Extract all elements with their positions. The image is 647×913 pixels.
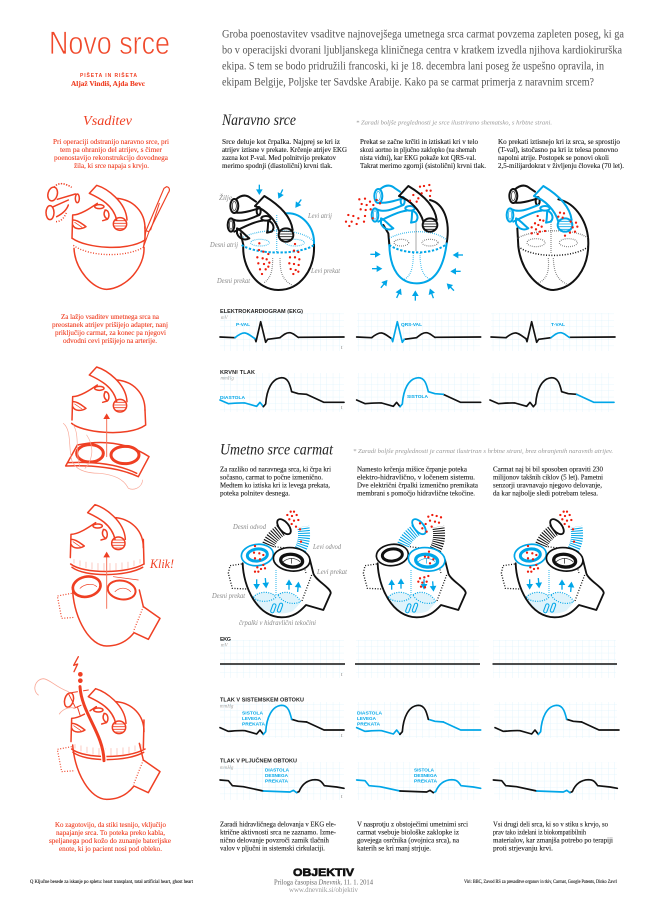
wave labels: P-VAL <box>236 322 250 328</box>
text: bottom column 1: Zaradi hidravličnega delovanja v EKG ele- <box>220 820 336 828</box>
text: bottom column 1: valov v pljučni in sistemski cirkulaciji. <box>220 843 325 852</box>
labels: natural heart: Žilje <box>219 192 233 202</box>
chart label: tlak v sistemskem obtoku: mmHg <box>220 704 234 710</box>
labels: natural heart: Levi atrij <box>307 211 332 220</box>
chart: EKG flat line: t <box>341 673 343 678</box>
text: bottom column 3: materialov, kar zmanjša potrebo po terapiji <box>493 835 613 844</box>
wave labels: SISTOLA <box>242 710 264 716</box>
byline: PIŠETA IN RIŠETA <box>80 71 137 79</box>
text: column 2: Namesto krčenja mišice črpanje poteka <box>357 464 468 474</box>
text: bottom column 2: V nasprotju z obstoječimi umetnimi srci <box>357 820 468 828</box>
footer: logo and publication <box>274 867 374 894</box>
text: bottom column 3: proti strjevanju krvi. <box>493 843 553 852</box>
chart label: EKG <box>220 637 231 648</box>
wave labels: LEVEGA <box>357 716 377 722</box>
chart label: krvni tlak: mmHg <box>220 376 234 382</box>
labels: carmat heart <box>211 522 348 627</box>
wave labels: PREKATA <box>242 722 266 728</box>
text: step 3: enote, ki jo pacient nosi pod obleko. <box>59 844 162 853</box>
heading: umetno srce carmat: Umetno srce carmat <box>220 442 334 458</box>
wave labels: PREKATA <box>265 778 289 784</box>
text: column 3: 2,5-milijardokrat v življenju človeka (70 let). <box>498 161 624 170</box>
intro text <box>222 28 624 88</box>
chart label: EKG: ELEKTROKARDIOGRAM (EKG) <box>220 309 303 315</box>
footer: keywords: Q Ključne besede za iskanje po spletu: heart transplant, total artificial heart, ghost heart <box>30 880 194 885</box>
wave labels <box>265 768 438 800</box>
text: step 2: odvodni cevi prišijejo na arterije. <box>63 336 157 345</box>
intro text: ekipa. S tem se bodo pridružili francoski, ki je 18. decembra lani poseg že uspešno opravila, in <box>222 60 604 72</box>
note: * Zaradi boljše preglednosti je carmat ilustriran s hrbtne strani, brez ohranjenih naravnih atrijev. <box>353 448 613 455</box>
illustration: carmat heart 2 <box>363 515 466 617</box>
text: bottom column 2 <box>357 820 468 852</box>
text: column 1 <box>220 464 331 498</box>
wave labels: t <box>341 406 343 411</box>
text: step 2: preostanek atrijev prišijejo adapter, nanj <box>52 320 168 329</box>
heading: vsaditev: Vsaditev <box>83 114 133 129</box>
wave labels: t <box>341 795 343 800</box>
illustration: carmat heart 3 <box>501 512 604 617</box>
text: column 3: senzorji uravnavajo njegovo delovanje, <box>493 480 602 490</box>
illustration: removed heart and scalpel <box>46 184 169 289</box>
label: klik: Klik! <box>149 556 174 571</box>
text: step 2: Za lažjo vsaditev umetnega srca na <box>61 312 160 321</box>
footer: logo and publication: www.dnevnik.si/objektiv <box>289 887 359 894</box>
text: bottom column 1: nično delovanje povzroči zamik tlačnih <box>220 835 329 844</box>
labels: carmat heart: Levi odvod <box>312 542 341 551</box>
byline <box>71 71 146 88</box>
chart label: tlak v sistemskem obtoku: TLAK V SISTEMSKEM OBTOKU <box>220 698 304 704</box>
text: column 1: Srce deluje kot črpalka. Najprej se kri iz <box>222 137 341 146</box>
text: column 1: merimo spodnji (diastolični) krvni tlak. <box>222 161 333 170</box>
chart label: tlak v pljučnem obtoku <box>220 758 297 771</box>
footer: logo and publication: Priloga časopisa Dnevnik, 11. 1. 2014 <box>274 880 374 886</box>
wave labels: T-VAL <box>551 322 565 328</box>
chart: blood pressure <box>220 370 614 412</box>
text: column 1: poteka polnitev desnega. <box>220 488 290 498</box>
chart label: EKG <box>220 309 303 321</box>
chart label: krvni tlak <box>220 370 255 382</box>
wave labels: DIASTOLA <box>220 395 246 401</box>
text: column 1: Za razliko od naravnega srca, ki črpa kri <box>220 464 331 474</box>
text: bottom column 1: ktrične aktivnosti srca ne zaznamo. Izme- <box>220 827 336 836</box>
illustration: natural heart, relaxation <box>507 186 588 290</box>
illustration: carmat heart 1 <box>228 512 331 617</box>
text: step 1: poenostavijo rekonstrukcijo dovodnega <box>54 153 169 162</box>
chart label: tlak v sistemskem obtoku <box>220 698 304 710</box>
wave labels: LEVEGA <box>242 716 262 722</box>
chart label: EKG: mV <box>221 316 229 321</box>
text: bottom column 2: katerih se kri manj strjuje. <box>357 843 431 852</box>
text: column 2: skozi aortno in pljučno zaklopko (na shemah <box>360 145 476 154</box>
text: step 3 <box>49 820 172 853</box>
text: step 1: Pri operaciji odstranijo naravno srce, pri <box>53 137 169 146</box>
chart label: tlak v pljučnem obtoku: mmHg <box>220 766 234 771</box>
text: column 1: atrijev iztisne v prekate. Krčenje atrijev EKG <box>222 145 348 154</box>
illustration: natural heart, atrial contraction <box>228 185 314 290</box>
text: column 1: sočasno, carmat to počne izmenično. <box>220 472 323 482</box>
text: column 2: Prekat se začne krčiti in iztiskati kri v telo <box>360 137 478 146</box>
wave labels <box>220 394 429 411</box>
title: Novo srce <box>49 25 170 61</box>
text: step 2: priključijo carmat, za konec pa njegovi <box>55 328 166 337</box>
wave labels: QRS-VAL <box>401 322 422 328</box>
note: * Zaradi boljše preglednosti je srce ilustrirano shematsko, s hrbtne strani. <box>356 120 552 126</box>
text: column 2: elektro-hidravlično, v ločenem sistemu. <box>357 472 475 482</box>
wave labels <box>242 710 383 739</box>
text: column 3 <box>498 137 624 170</box>
text: column 3: milijonov takšnih ciklov (5 let). Pametni <box>493 472 603 482</box>
text: column 2: Takrat merimo zgornji (sistolični) krvni tlak. <box>360 161 486 170</box>
chart label: tlak v pljučnem obtoku: TLAK V PLJUČNEM OBTOKU <box>220 758 297 764</box>
wave labels: SISTOLA <box>407 394 429 400</box>
text: column 2: Dve električni črpalki izmenično premikata <box>357 480 479 490</box>
text: step 1 <box>53 137 169 170</box>
text: bottom column 2: carmat vsebuje biološke zaklopke iz <box>357 827 460 836</box>
text: column 1: Medtem ko iztiska kri iz levega prekata, <box>220 480 330 490</box>
heading: naravno srce: Naravno srce <box>221 112 296 129</box>
panel: umetno srce carmat <box>211 442 619 852</box>
text: column 3: Ko prekati iztisnejo kri iz srca, se sprostijo <box>498 137 620 146</box>
text: column 3: Carmat naj bi bil sposoben opraviti 230 <box>493 464 603 474</box>
wave labels: t <box>341 346 343 351</box>
wave labels: DESNEGA <box>265 773 289 779</box>
chart label: EKG: mV <box>221 644 229 648</box>
illustration: click connection <box>57 505 160 646</box>
labels: natural heart: Desni prekat <box>216 276 251 285</box>
chart: EKG flat line <box>220 637 617 678</box>
chart: pulmonary pressure <box>220 758 617 800</box>
text: column 3: da kar najbolje sledi potrebam telesa. <box>493 488 598 498</box>
wave labels: t <box>341 734 343 739</box>
footer: sources: Viri: BBC, Zavod RS za presaditve organov in tkiv, Carmat, Google Patents, Dinko Zavrl <box>464 880 618 885</box>
text: column 1: zazna kot P-val. Med polnitvijo prekatov <box>222 153 336 162</box>
text: bottom column 1 <box>220 820 336 852</box>
labels: carmat heart: Desni odvod <box>232 522 266 531</box>
text: step 3: napajanje srca. To poteka preko kabla, <box>56 828 165 837</box>
text: column 2: nista vidni), kar EKG pokaže kot QRS-val. <box>360 153 476 162</box>
text: step 1: žila, ki srce napaja s krvjo. <box>74 161 149 170</box>
wave labels: PREKATA <box>414 778 438 784</box>
text: step 3: Ko zagotovijo, da stiki tesnijo, vključijo <box>55 820 166 829</box>
text: step 3: speljanega pod kožo do zunanje baterijske <box>49 836 172 845</box>
panel: vsaditev <box>35 114 174 853</box>
text: column 1 <box>222 137 348 170</box>
illustration: powered heart with cable <box>35 657 160 799</box>
wave labels <box>236 322 565 351</box>
labels: natural heart <box>209 192 341 285</box>
labels: carmat heart: Desni prekat <box>211 591 246 600</box>
text: step 1: tem pa ohranijo del atrijev, s čimer <box>60 145 162 154</box>
text: bottom column 3: prav tako izdelani iz biokompatibilnih <box>493 827 586 836</box>
text: step 2 <box>52 312 168 345</box>
text: column 2 <box>357 464 479 498</box>
text: column 3: (T-val), istočasno pa kri iz telesa ponovno <box>498 145 618 154</box>
intro text: ekipam Belgije, Poljske ter Savdske Arabije. Kako pa se carmat primerja z naravnim srcem? <box>222 76 594 88</box>
chart: electrocardiogram <box>220 309 615 351</box>
text: column 3: napolni atrije. Postopek se ponovi okoli <box>498 153 609 162</box>
byline: Aljaž Vindiš, Ajda Bevc <box>71 79 146 88</box>
text: column 2 <box>360 137 486 170</box>
wave labels: PREKATA <box>357 722 381 728</box>
text: column 2: membrani s pomočjo hidravlične tekočine. <box>357 488 475 498</box>
labels: natural heart: Desni atrij <box>209 240 238 249</box>
labels: carmat heart: Levi prekat <box>316 567 348 576</box>
wave labels: DIASTOLA <box>265 768 290 774</box>
footer: logo and publication: OBJEKTIV <box>293 867 355 879</box>
illustration: adapter attached <box>63 367 149 489</box>
panel: naravno srce <box>209 112 624 412</box>
text: bottom column 3 <box>493 820 613 852</box>
chart label: EKG: EKG <box>220 637 231 643</box>
wave labels: SISTOLA <box>414 768 435 774</box>
chart: systemic pressure <box>220 698 619 739</box>
labels: natural heart: Levi prekat <box>310 266 341 275</box>
illustration: natural heart, ventricular contraction <box>346 185 463 301</box>
text: bottom column 3: Vsi drugi deli srca, ki so v stiku s krvjo, so <box>493 820 608 828</box>
wave labels: DIASTOLA <box>357 710 383 716</box>
text: bottom column 2: govejega osrčnika (ovojnica srca), na <box>357 835 460 844</box>
wave labels: DESNEGA <box>414 773 438 779</box>
text: column 3 <box>493 464 603 498</box>
labels: carmat heart: črpalki v hidravlični tekočini <box>239 618 316 627</box>
chart label: krvni tlak: KRVNI TLAK <box>220 370 255 376</box>
